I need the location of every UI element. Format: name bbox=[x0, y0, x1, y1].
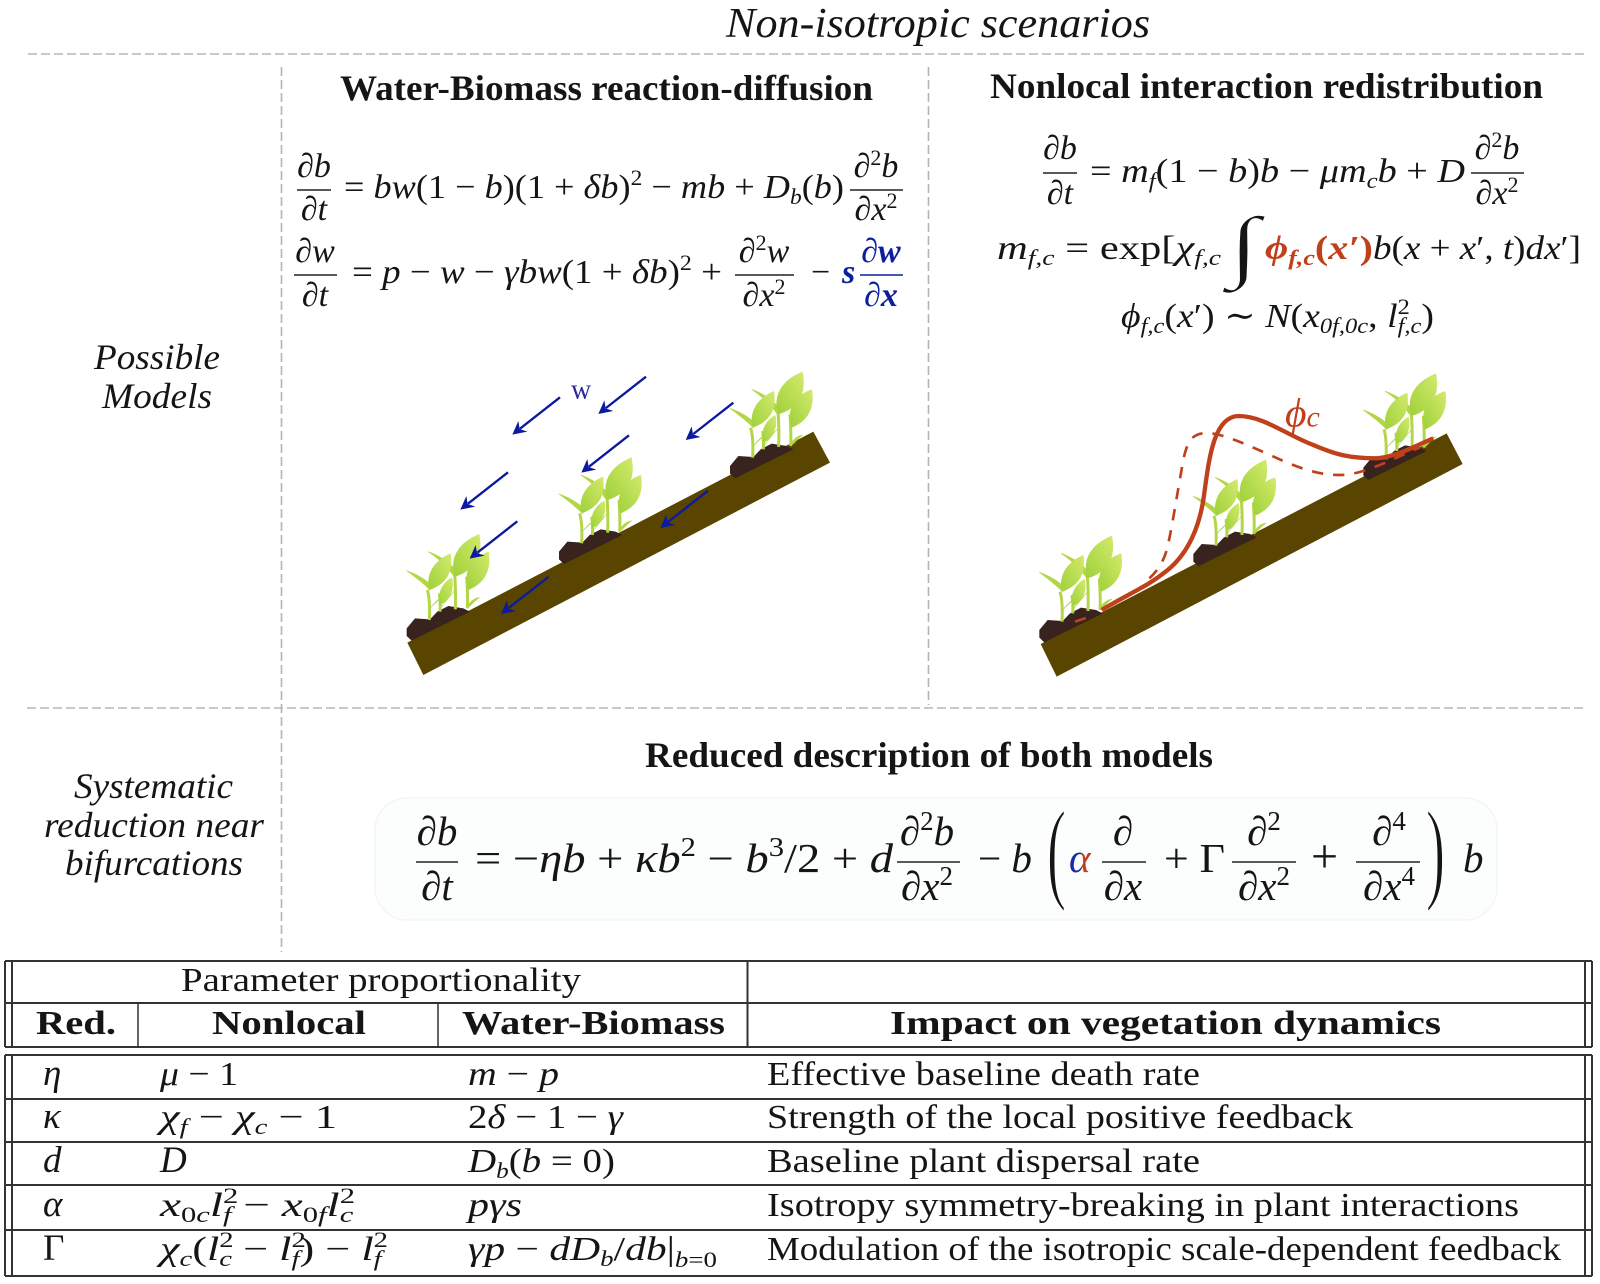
equation: reduced: b bbox=[1463, 835, 1484, 881]
equation: reduced: − bbox=[696, 835, 745, 881]
row: gamma: Γ bbox=[43, 1228, 64, 1269]
row: alpha: − bbox=[231, 1187, 282, 1224]
equation: reduced: − b bbox=[978, 835, 1032, 881]
row: gamma: c bbox=[219, 1246, 232, 1271]
equation: reduced: b bbox=[745, 835, 769, 881]
row: kappa: − bbox=[188, 1099, 235, 1136]
equation: reduced: ∂ bbox=[1372, 808, 1392, 854]
row: d: b = 0) bbox=[522, 1143, 606, 1180]
equation: kernel integral: f,c bbox=[1288, 245, 1315, 270]
heading: nonlocal: Nonlocal interaction redistribution bbox=[990, 66, 1543, 106]
equation: biomass: mb + D bbox=[681, 169, 788, 206]
table: parameter header bbox=[5, 961, 1592, 1047]
equation: nonlocal biomass: b)b − μm bbox=[1228, 153, 1361, 190]
equation: nonlocal biomass: ∂x bbox=[1476, 175, 1507, 212]
row: alpha: 2 bbox=[340, 1183, 355, 1208]
table: parameter rows bbox=[5, 1053, 1592, 1276]
equation: reduced: /2 + bbox=[784, 835, 870, 881]
row: alpha: α bbox=[43, 1184, 64, 1225]
equation: kernel integral: ( bbox=[1315, 230, 1328, 267]
equation: nonlocal biomass: 2 bbox=[1507, 172, 1518, 197]
equation: reduced: ∂x bbox=[1363, 863, 1401, 909]
equation: water: w bbox=[767, 233, 790, 270]
row: kappa: 2δ − 1 − γ bbox=[468, 1099, 625, 1136]
equation: biomass: ∂x bbox=[855, 191, 886, 228]
equation: kernel distribution: f,c bbox=[1398, 313, 1422, 338]
plant: middle bbox=[559, 457, 642, 564]
row: eta: Effective baseline death rate bbox=[767, 1056, 1200, 1093]
row: alpha: l bbox=[327, 1187, 340, 1224]
equation: kernel distribution: 0f,0c bbox=[1320, 313, 1368, 338]
row: gamma: 2 bbox=[219, 1227, 234, 1252]
equation: kernel integral: x′) bbox=[1328, 230, 1371, 267]
row: kappa: f bbox=[180, 1114, 191, 1139]
equation: reduced: ∂ bbox=[900, 808, 920, 854]
row: kappa: c bbox=[255, 1114, 268, 1139]
row: gamma: 2 bbox=[374, 1227, 388, 1252]
equation: reduced: ∂x bbox=[901, 863, 939, 909]
equation: water: + bbox=[692, 254, 722, 291]
row: gamma: ( bbox=[192, 1231, 207, 1268]
label: systematic reduction near bifurcations: bifurcations bbox=[65, 843, 243, 883]
equation: water: ∂w bbox=[295, 233, 335, 270]
row: eta: η bbox=[43, 1053, 61, 1094]
equation: reduced: 4 bbox=[1401, 861, 1415, 891]
equation: nonlocal biomass: b bbox=[1378, 153, 1397, 190]
label: possible models: Possible bbox=[93, 337, 220, 377]
row: alpha: c bbox=[340, 1202, 354, 1227]
equation: kernel integral: f,c bbox=[1194, 245, 1221, 270]
equation: kernel integral: m bbox=[997, 230, 1028, 267]
equation: reduced: 2 bbox=[681, 832, 696, 862]
row: gamma: b bbox=[600, 1246, 614, 1271]
equation: kernel integral: f,c bbox=[1028, 245, 1055, 270]
equation: water: 2 bbox=[680, 250, 692, 275]
label: systematic reduction near bifurcations: reduction near bbox=[44, 805, 265, 845]
label: w: w bbox=[571, 374, 592, 405]
equation: reduced: ∂x bbox=[1238, 863, 1276, 909]
row: kappa: χ bbox=[231, 1099, 256, 1136]
row: d: b bbox=[496, 1158, 509, 1183]
plant: upper bbox=[730, 372, 813, 478]
title: Non-isotropic scenarios bbox=[725, 1, 1150, 47]
row: gamma bbox=[43, 1227, 1561, 1272]
row: eta: m − p bbox=[468, 1056, 559, 1093]
label: possible models bbox=[93, 337, 220, 416]
equation: kernel distribution: ( bbox=[1164, 298, 1177, 335]
row: kappa bbox=[43, 1096, 1353, 1139]
equation: biomass: b bbox=[790, 184, 802, 209]
equation: kernel distribution: ) bbox=[1421, 298, 1434, 335]
row: eta bbox=[43, 1053, 1200, 1094]
equation: reduced: d bbox=[870, 835, 894, 881]
row: gamma: Modulation of the isotropic scale-dependent feedback bbox=[767, 1231, 1561, 1268]
equation: water: ∂x bbox=[743, 277, 774, 314]
equation: water: ∂ bbox=[739, 233, 756, 270]
equation: kernel distribution: , bbox=[1368, 298, 1387, 335]
header: nonlocal: Nonlocal bbox=[212, 1005, 366, 1042]
illustration: slope with kernels bbox=[1039, 373, 1463, 677]
equation: water: 2 bbox=[756, 230, 767, 255]
equation: reduced: 2 bbox=[939, 861, 953, 891]
label: phi c: ϕc bbox=[1285, 391, 1320, 437]
ground slope bbox=[1041, 433, 1463, 677]
equation: reduced: ∂ bbox=[1247, 808, 1267, 854]
label: systematic reduction near bifurcations bbox=[44, 766, 265, 883]
row: kappa: κ bbox=[43, 1096, 62, 1137]
row: alpha bbox=[43, 1183, 1519, 1227]
row: alpha: l bbox=[210, 1187, 223, 1224]
row: gamma: 2 bbox=[291, 1227, 306, 1252]
equation: biomass: ∂b bbox=[297, 148, 331, 185]
equation: reduced: α bbox=[1069, 835, 1092, 881]
header: water-biomass: Water-Biomass bbox=[462, 1005, 725, 1042]
equation: reduced: ∂x bbox=[1104, 863, 1142, 909]
row: gamma: b=0 bbox=[675, 1247, 712, 1272]
kernel: dashed bbox=[1075, 433, 1420, 622]
row: gamma: l bbox=[361, 1231, 374, 1268]
row: eta: μ − 1 bbox=[159, 1056, 238, 1093]
equation: water: ∂x bbox=[864, 277, 898, 314]
equation: nonlocal biomass: 2 bbox=[1491, 127, 1502, 152]
equation: reduced: ∂t bbox=[421, 863, 454, 909]
equation: water bbox=[294, 230, 903, 314]
ground slope bbox=[407, 432, 830, 675]
equation: nonlocal biomass: c bbox=[1367, 168, 1378, 193]
row: alpha: f bbox=[223, 1202, 235, 1227]
equation: reduced bbox=[416, 789, 1484, 913]
row: d: ( bbox=[509, 1143, 522, 1180]
equation: water: = p − w − γbw(1 + δb) bbox=[352, 254, 679, 291]
row: alpha: x bbox=[280, 1187, 303, 1224]
row: gamma: f bbox=[291, 1246, 303, 1271]
equation: reduced: ∂b bbox=[417, 808, 457, 854]
row: gamma: ) − bbox=[299, 1231, 361, 1268]
equation: kernel distribution: f,c bbox=[1141, 313, 1165, 338]
row: alpha: x bbox=[159, 1187, 181, 1224]
row: d: D bbox=[159, 1140, 187, 1181]
equation: nonlocal biomass: = m bbox=[1090, 153, 1146, 190]
equation: biomass: b) bbox=[814, 169, 843, 206]
panel: water-biomass model bbox=[294, 68, 903, 675]
equation: reduced: 3 bbox=[769, 832, 784, 862]
row: d bbox=[43, 1140, 1200, 1183]
equation: water: 2 bbox=[774, 274, 785, 299]
kernel: solid bbox=[1102, 416, 1433, 610]
equation: reduced: + bbox=[1311, 830, 1338, 883]
equation: kernel distribution: 2 bbox=[1398, 294, 1410, 319]
equation: kernel integral: = exp[ bbox=[1055, 230, 1175, 267]
equation: reduced: 4 bbox=[1392, 806, 1406, 836]
equation: reduced: 2 bbox=[1267, 806, 1281, 836]
equation: nonlocal biomass: f bbox=[1149, 168, 1159, 193]
equation: biomass: − bbox=[642, 169, 681, 206]
row: gamma: γp − dD bbox=[468, 1231, 591, 1268]
equation: kernel distribution: l bbox=[1387, 298, 1398, 335]
heading: water-biomass: Water-Biomass reaction-diffusion bbox=[340, 68, 873, 108]
heading: reduced description: Reduced description of both models bbox=[645, 735, 1213, 775]
equation: reduced: ∂ bbox=[1113, 808, 1133, 854]
header: red: Red. bbox=[36, 1005, 116, 1042]
equation: reduced: b bbox=[934, 808, 954, 854]
equation: kernel integral: χ bbox=[1172, 230, 1196, 267]
equation: nonlocal biomass bbox=[1043, 127, 1524, 212]
equation: water: ∂w bbox=[861, 233, 901, 270]
equation: nonlocal biomass: + D bbox=[1405, 153, 1462, 190]
equation: biomass: ( bbox=[802, 169, 814, 206]
row: kappa: − 1 bbox=[267, 1099, 337, 1136]
equation: kernel integral: b(x + x′, t)dx′] bbox=[1373, 230, 1581, 267]
equation: reduced: ( bbox=[1047, 789, 1066, 913]
equation: biomass: 2 bbox=[870, 145, 881, 170]
equation: reduced: = −ηb + κb bbox=[475, 835, 675, 881]
equation: kernel distribution: ϕ bbox=[1121, 298, 1141, 335]
equation: reduced: 2 bbox=[920, 806, 934, 836]
equation: water: s bbox=[841, 254, 855, 291]
plant: upper bbox=[1363, 373, 1446, 480]
row: alpha: pγs bbox=[466, 1187, 522, 1224]
row: gamma: l bbox=[207, 1231, 219, 1268]
panel: nonlocal model bbox=[990, 66, 1581, 677]
equation: biomass: ∂ bbox=[854, 148, 870, 185]
row: gamma: / bbox=[614, 1231, 626, 1268]
equation: biomass: ∂t bbox=[301, 191, 329, 228]
equation: nonlocal biomass: b bbox=[1502, 130, 1519, 167]
equation: water: ∂t bbox=[302, 277, 330, 314]
row: gamma: db| bbox=[625, 1231, 673, 1268]
label: systematic reduction near bifurcations: Systematic bbox=[74, 766, 233, 806]
equation: kernel integral bbox=[997, 202, 1581, 294]
row: alpha: 2 bbox=[223, 1183, 238, 1208]
row: gamma: c bbox=[180, 1246, 193, 1271]
plant: lower bbox=[1039, 536, 1122, 642]
equation: water: − bbox=[811, 254, 830, 291]
row: gamma: χ bbox=[156, 1231, 181, 1268]
equation: biomass: 2 bbox=[886, 188, 897, 213]
equation: biomass: = bw(1 − b)(1 + δb) bbox=[344, 169, 630, 206]
equation: kernel integral: ϕ bbox=[1265, 230, 1285, 267]
equation: reduced: ) bbox=[1426, 789, 1445, 913]
row: kappa: Strength of the local positive feedback bbox=[767, 1099, 1353, 1136]
equation: biomass bbox=[297, 145, 903, 228]
row: alpha: 0c bbox=[181, 1202, 206, 1227]
plant: middle bbox=[1193, 460, 1276, 566]
label: possible models: Models bbox=[101, 376, 212, 416]
row: d: D bbox=[467, 1143, 497, 1180]
equation box bbox=[375, 798, 1497, 920]
equation: biomass: 2 bbox=[631, 165, 642, 190]
row: alpha: 0f bbox=[303, 1202, 324, 1227]
row: gamma: f bbox=[374, 1246, 385, 1271]
equation: nonlocal biomass: ∂b bbox=[1043, 130, 1077, 167]
row: alpha: Isotropy symmetry-breaking in plant interactions bbox=[767, 1187, 1519, 1224]
row: gamma: l bbox=[279, 1231, 291, 1268]
equation: nonlocal biomass: ∂t bbox=[1047, 175, 1075, 212]
equation: reduced: 2 bbox=[1276, 861, 1290, 891]
header: parameter proportionality: Parameter proportionality bbox=[181, 962, 581, 999]
equation: kernel integral: ∫ bbox=[1221, 202, 1267, 294]
water arrows bbox=[460, 377, 733, 614]
illustration: slope with water flow bbox=[407, 372, 830, 675]
panel: reduced description bbox=[375, 735, 1497, 920]
row: kappa: χ bbox=[156, 1099, 181, 1136]
equation: nonlocal biomass: (1 − bbox=[1156, 153, 1228, 190]
equation: nonlocal biomass: ∂ bbox=[1475, 130, 1491, 167]
row: d: Baseline plant dispersal rate bbox=[767, 1143, 1200, 1180]
equation: biomass: b bbox=[881, 148, 898, 185]
equation: kernel distribution: x′) ∼ N(x bbox=[1177, 298, 1318, 335]
equation: reduced: + Γ bbox=[1164, 835, 1225, 881]
header: impact: Impact on vegetation dynamics bbox=[890, 1005, 1441, 1042]
row: d: d bbox=[43, 1140, 62, 1181]
plant: lower bbox=[407, 534, 489, 641]
row: gamma: − bbox=[232, 1231, 279, 1268]
